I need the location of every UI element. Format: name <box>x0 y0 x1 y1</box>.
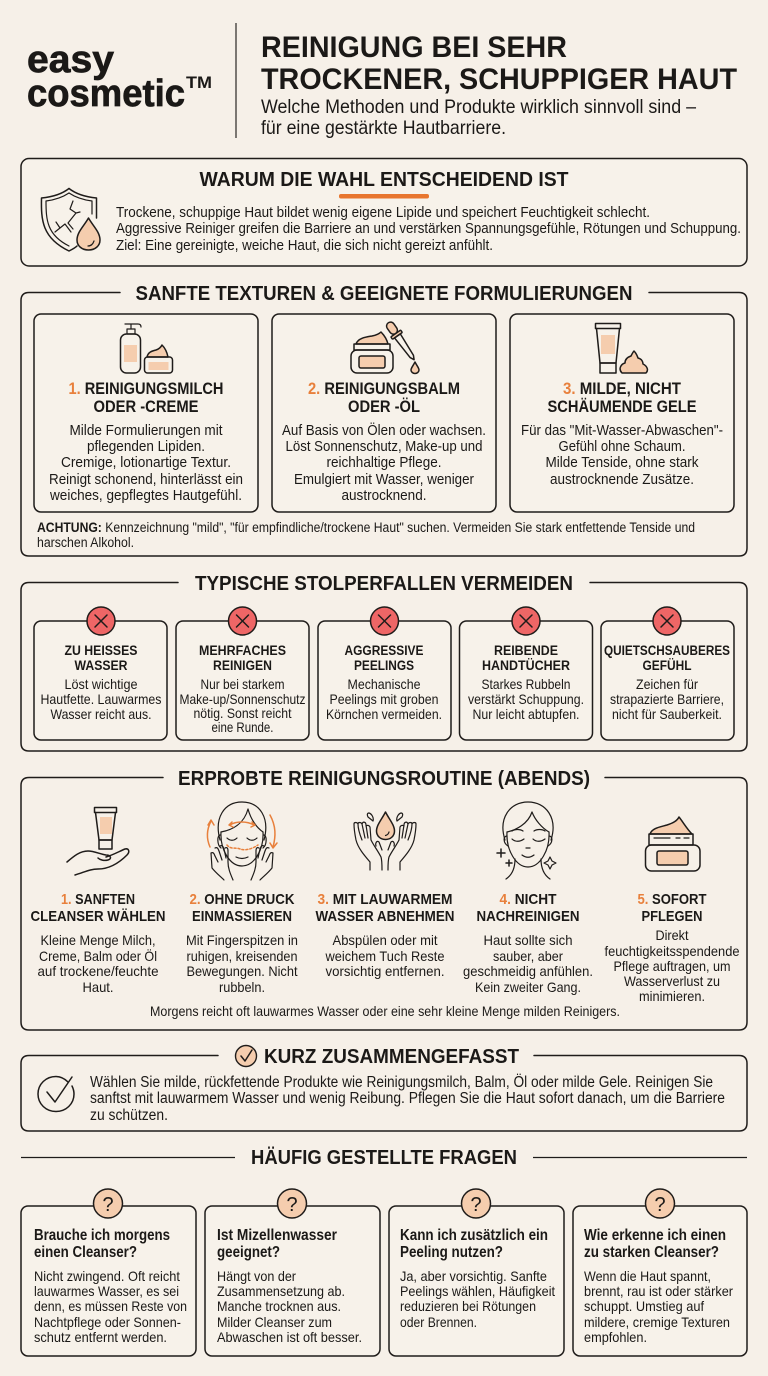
card: aggressive peelings: PEELINGS <box>354 658 414 673</box>
card: faq 1: Brauche ich morgens <box>34 1227 170 1244</box>
logo: easy cosmetic <box>27 39 212 115</box>
text: step 3 <box>325 933 445 979</box>
heading: step 1: CLEANSER WÄHLEN <box>30 908 166 925</box>
card: faq 4: Wenn die Haut spannt, <box>584 1269 711 1284</box>
icon: question mark: ? <box>286 1194 298 1216</box>
title: REINIGUNG BEI SEHR <box>261 31 567 64</box>
card: faq 1 <box>21 1189 196 1356</box>
text: reinigungsbalm body: Auf Basis von Ölen oder wachsen. <box>282 421 486 439</box>
heading: step 1 <box>30 891 166 925</box>
text: step 5: Wasserverlust zu <box>624 974 720 989</box>
card: mehrfaches reinigen: REINIGEN <box>213 658 272 673</box>
heading: step 4: NACHREINIGEN <box>476 908 580 925</box>
card: zu heisses wasser <box>34 607 167 740</box>
card: faq 4: schuppt. Umstieg auf <box>584 1299 704 1314</box>
card: faq 4: brennt, rau ist oder stärker <box>584 1284 733 1299</box>
card: faq 4: zu starken Cleanser? <box>584 1244 719 1261</box>
heading: warum: WARUM DIE WAHL ENTSCHEIDEND IST <box>200 168 569 191</box>
icon: tube over hand <box>67 808 129 875</box>
icon: hands with water drop <box>354 812 416 870</box>
heading: 3 milde gele <box>548 380 696 416</box>
card: faq 3: reduzieren bei Rötungen <box>400 1299 536 1314</box>
card: faq 4: empfohlen. <box>584 1330 647 1345</box>
text: reinigungsbalm body <box>282 421 486 504</box>
subtitle: Welche Methoden und Produkte wirklich sinnvoll sind – <box>261 96 696 118</box>
heading: step 3: 3. MIT LAUWARMEM <box>318 891 452 908</box>
card: zu heisses wasser: ZU HEISSES <box>64 643 138 658</box>
icon: large check <box>38 1076 74 1112</box>
step 3 <box>316 812 454 979</box>
text: step 1 <box>38 933 159 995</box>
text: morning note: Morgens reicht oft lauwarmes Wasser oder eine sehr kleine Menge milden Reinigers. <box>150 1004 620 1019</box>
text: achtung note: harschen Alkohol. <box>37 535 134 550</box>
heading: step 3: WASSER ABNEHMEN <box>316 908 454 925</box>
card: faq 3 <box>389 1189 564 1356</box>
card: faq 1: schutz entfernt werden. <box>34 1330 167 1345</box>
text: step 5: Direkt <box>656 928 689 943</box>
card: faq 2: Milder Cleanser zum <box>217 1315 332 1330</box>
step 2 <box>186 802 298 995</box>
text: reinigungsmilch body <box>49 423 243 504</box>
text: step 5: feuchtigkeitsspendende <box>604 944 740 959</box>
heading: 2 reinigungsbalm: 2. REINIGUNGSBALM <box>308 380 460 398</box>
text: milde gele body: Gefühl ohne Schaum. <box>558 439 686 455</box>
text: step 2: rubbeln. <box>219 980 265 995</box>
text: step 2 <box>186 933 298 995</box>
heading: 1 reinigungsmilch <box>68 380 224 416</box>
text: step 3: vorsichtig entfernen. <box>326 964 444 979</box>
card: zu heisses wasser: Löst wichtige <box>64 677 138 692</box>
heading: 2 reinigungsbalm: ODER -ÖL <box>348 397 420 416</box>
icon: question mark <box>646 1189 674 1218</box>
icon: question mark <box>278 1189 306 1218</box>
card: mehrfaches reinigen: eine Runde. <box>212 720 274 735</box>
subtitle <box>261 96 696 139</box>
text: step 5: Pflege auftragen, um <box>614 959 730 974</box>
card: aggressive peelings <box>318 607 451 740</box>
heading: step 5: 5. SOFORT <box>638 891 706 908</box>
icon: cream jar <box>646 817 700 871</box>
icon: question mark <box>94 1189 122 1218</box>
text: reinigungsmilch body: Reinigt schonend, hinterlässt ein <box>49 472 243 488</box>
step 5 <box>604 817 740 1004</box>
card: reinigungsbalm <box>272 314 496 512</box>
text: step 5: minimieren. <box>639 989 705 1004</box>
icon: bottle and jar <box>120 324 172 373</box>
heading: step 1: 1. SANFTEN <box>61 891 135 908</box>
text: step 1: Kleine Menge Milch, <box>40 933 156 948</box>
card: faq 1: denn, es müssen Reste von <box>34 1299 187 1314</box>
text: milde gele body <box>521 423 723 488</box>
card: reibende handtuecher: verstärkt Schuppung. <box>468 692 584 707</box>
card: faq 1: lauwarmes Wasser, es sei <box>34 1284 179 1299</box>
text: step 3: weichem Tuch Reste <box>325 949 445 964</box>
title <box>261 31 737 96</box>
text: reinigungsbalm body: Emulgiert mit Wasser, weniger <box>294 472 474 488</box>
icon: red cross <box>653 607 681 635</box>
icon: red cross <box>512 607 540 635</box>
icon: heading check badge <box>236 1046 256 1066</box>
heading: 1 reinigungsmilch: ODER -CREME <box>94 398 198 416</box>
heading: faq: HÄUFIG GESTELLTE FRAGEN <box>251 1146 517 1169</box>
card: quietschsauberes gefuehl: nicht für Sauberkeit. <box>612 707 722 722</box>
text: reinigungsmilch body: weiches, gepflegtes Hautgefühl. <box>49 488 242 504</box>
text: step 2: Bewegungen. Nicht <box>186 964 298 979</box>
text: milde gele body: Milde Tenside, ohne stark <box>546 455 699 471</box>
card: faq 4: mildere, cremige Texturen <box>584 1315 730 1330</box>
text: achtung note: ACHTUNG: Kennzeichnung "mild", "für empfindliche/trockene Haut" suchen. Vermeiden Sie stark entfettende Tenside und <box>37 520 695 535</box>
card: reibende handtuecher: Starkes Rubbeln <box>482 677 570 692</box>
text: summary body <box>90 1073 725 1124</box>
card: faq 2: geeignet? <box>217 1244 280 1261</box>
icon: red cross <box>87 607 115 635</box>
text: step 1: Creme, Balm oder Öl <box>39 947 157 964</box>
heading: step 5 <box>638 891 706 925</box>
heading: step 4 <box>476 891 580 925</box>
text: step 3: Abspülen oder mit <box>332 933 438 948</box>
icon: tube and foam <box>596 324 647 373</box>
panel: sanfte texturen <box>21 282 747 556</box>
text: reinigungsbalm body: austrocknend. <box>342 488 426 504</box>
card: faq 3: Peelings wählen, Häufigkeit <box>400 1284 555 1299</box>
text: step 2: Mit Fingerspitzen in <box>186 933 298 948</box>
heading: 3 milde gele: SCHÄUMENDE GELE <box>548 398 696 416</box>
card: faq 2: Manche trocknen aus. <box>217 1299 341 1314</box>
card: faq 4 <box>573 1189 747 1356</box>
card: mehrfaches reinigen <box>176 607 309 740</box>
heading: 3 milde gele: 3. MILDE, NICHT <box>563 380 681 398</box>
icon: question mark: ? <box>470 1194 482 1216</box>
step 4 <box>463 802 593 995</box>
text: reinigungsmilch body: Cremige, lotionartige Textur. <box>61 455 231 471</box>
card: quietschsauberes gefuehl <box>601 607 734 740</box>
icon: cracked shield with drop <box>41 188 100 251</box>
heading: stolperfallen: TYPISCHE STOLPERFALLEN VERMEIDEN <box>195 572 573 595</box>
text: reinigungsbalm body: Löst Sonnenschutz, Make-up und <box>286 439 482 455</box>
icon: jar and dropper <box>351 319 419 374</box>
heading: 1 reinigungsmilch: 1. REINIGUNGSMILCH <box>68 380 224 398</box>
card: reibende handtuecher: Nur leicht abtupfen. <box>472 707 580 722</box>
icon: face massage <box>207 802 277 880</box>
card: aggressive peelings: Peelings mit groben <box>330 692 438 707</box>
text: step 5 <box>604 928 740 1004</box>
heading: step 5: PFLEGEN <box>642 908 702 925</box>
text: step 4: geschmeidig anfühlen. <box>463 964 593 979</box>
text: milde gele body: austrocknende Zusätze. <box>550 472 694 488</box>
text: reinigungsmilch body: pflegenden Lipiden. <box>87 439 205 455</box>
logo: easy cosmetic: cosmetic <box>27 73 185 115</box>
card: mehrfaches reinigen: MEHRFACHES <box>199 643 286 658</box>
card: quietschsauberes gefuehl: Zeichen für <box>636 677 698 692</box>
card: zu heisses wasser: WASSER <box>74 658 128 673</box>
panel: warum die wahl entscheidend ist <box>21 158 747 266</box>
text: step 1: auf trockene/feuchte <box>38 964 159 979</box>
heading: reinigungsroutine: ERPROBTE REINIGUNGSROUTINE (ABENDS) <box>178 767 590 790</box>
heading: 2 reinigungsbalm <box>308 380 460 416</box>
section: haeufig gestellte fragen <box>21 1146 747 1356</box>
card: faq 2 <box>205 1189 380 1356</box>
icon: question mark <box>462 1189 490 1218</box>
heading: step 2: 2. OHNE DRUCK <box>190 891 295 908</box>
card: aggressive peelings: AGGRESSIVE <box>344 643 424 658</box>
card: reibende handtuecher: REIBENDE <box>494 643 558 658</box>
card: reibende handtuecher: HANDTÜCHER <box>482 658 570 673</box>
card: faq 1: einen Cleanser? <box>34 1244 137 1261</box>
logo: easy cosmetic: easy <box>27 39 114 81</box>
text: warum body: Trockene, schuppige Haut bildet wenig eigene Lipide und speichert Feuchtigkeit schlecht. <box>116 205 650 221</box>
card: reinigungsmilch <box>34 314 258 512</box>
icon: calm face with sparkles <box>497 802 556 879</box>
text: summary body: zu schützen. <box>90 1107 168 1124</box>
card: faq 2: Zusammensetzung ab. <box>217 1284 345 1299</box>
icon: question mark: ? <box>102 1194 114 1216</box>
icon: red cross <box>370 607 398 635</box>
heading: kurz zusammengefasst: KURZ ZUSAMMENGEFASST <box>264 1045 519 1068</box>
card: faq 2: Abwaschen ist oft besser. <box>217 1330 362 1345</box>
card: zu heisses wasser: Hautfette. Lauwarmes <box>40 692 162 707</box>
text: achtung note <box>37 520 695 550</box>
card: quietschsauberes gefuehl: GEFÜHL <box>642 658 692 673</box>
text: warum body: Ziel: Eine gereinigte, weiche Haut, die sich nicht gereizt anfühlt. <box>116 238 493 254</box>
card: aggressive peelings: Körnchen vermeiden. <box>326 707 442 722</box>
card: faq 3: Ja, aber vorsichtig. Sanfte <box>400 1269 547 1284</box>
card: milde gele <box>510 314 734 512</box>
icon: red cross <box>228 607 256 635</box>
heading: step 4: 4. NICHT <box>500 891 556 908</box>
text: warum body <box>116 205 741 254</box>
step 1 <box>30 808 166 995</box>
logo: easy cosmetic: TM <box>186 74 212 92</box>
card: faq 2: Hängt von der <box>217 1269 296 1284</box>
text: step 4: Haut sollte sich <box>484 933 572 948</box>
title: TROCKENER, SCHUPPIGER HAUT <box>261 63 737 96</box>
text: step 2: ruhigen, kreisenden <box>186 949 298 964</box>
card: faq 3: Peeling nutzen? <box>400 1244 503 1261</box>
card: quietschsauberes gefuehl: QUIETSCHSAUBERES <box>604 643 730 658</box>
card: faq 1: Nicht zwingend. Oft reicht <box>34 1269 180 1284</box>
panel: stolperfallen <box>21 572 747 751</box>
panel: kurz zusammengefasst <box>21 1045 747 1131</box>
heading: step 2: EINMASSIEREN <box>192 908 292 925</box>
text: step 4: Kein zweiter Gang. <box>475 980 581 995</box>
heading: step 3 <box>316 891 454 925</box>
panel: reinigungsroutine <box>21 767 747 1030</box>
text: reinigungsmilch body: Milde Formulierungen mit <box>70 423 222 439</box>
text: step 4 <box>463 933 593 995</box>
card: faq 3: Kann ich zusätzlich ein <box>400 1227 548 1244</box>
subtitle: für eine gestärkte Hautbarriere. <box>261 117 506 139</box>
card: mehrfaches reinigen: nötig. Sonst reicht <box>194 706 292 721</box>
text: milde gele body: Für das "Mit-Wasser-Abwaschen"- <box>521 423 723 439</box>
heading: step 2 <box>190 891 295 925</box>
card: zu heisses wasser: Wasser reicht aus. <box>50 707 152 722</box>
text: step 1: Haut. <box>82 980 114 995</box>
heading: sanfte texturen: SANFTE TEXTUREN & GEEIGNETE FORMULIERUNGEN <box>136 282 632 305</box>
card: aggressive peelings: Mechanische <box>348 677 421 692</box>
card: faq 3: oder Brennen. <box>400 1315 477 1330</box>
text: step 4: sauber, aber <box>493 949 563 964</box>
card: faq 4: Wie erkenne ich einen <box>584 1227 726 1244</box>
text: reinigungsbalm body: reichhaltige Pflege. <box>326 455 442 471</box>
card: faq 2: Ist Mizellenwasser <box>217 1227 337 1244</box>
icon: question mark: ? <box>654 1194 666 1216</box>
card: reibende handtuecher <box>460 607 592 740</box>
card: mehrfaches reinigen: Make-up/Sonnenschutz <box>180 692 306 707</box>
card: mehrfaches reinigen: Nur bei starkem <box>200 677 284 692</box>
card: faq 1: Nachtpflege oder Sonnen- <box>34 1315 181 1330</box>
card: quietschsauberes gefuehl: strapazierte Barriere, <box>610 692 724 707</box>
